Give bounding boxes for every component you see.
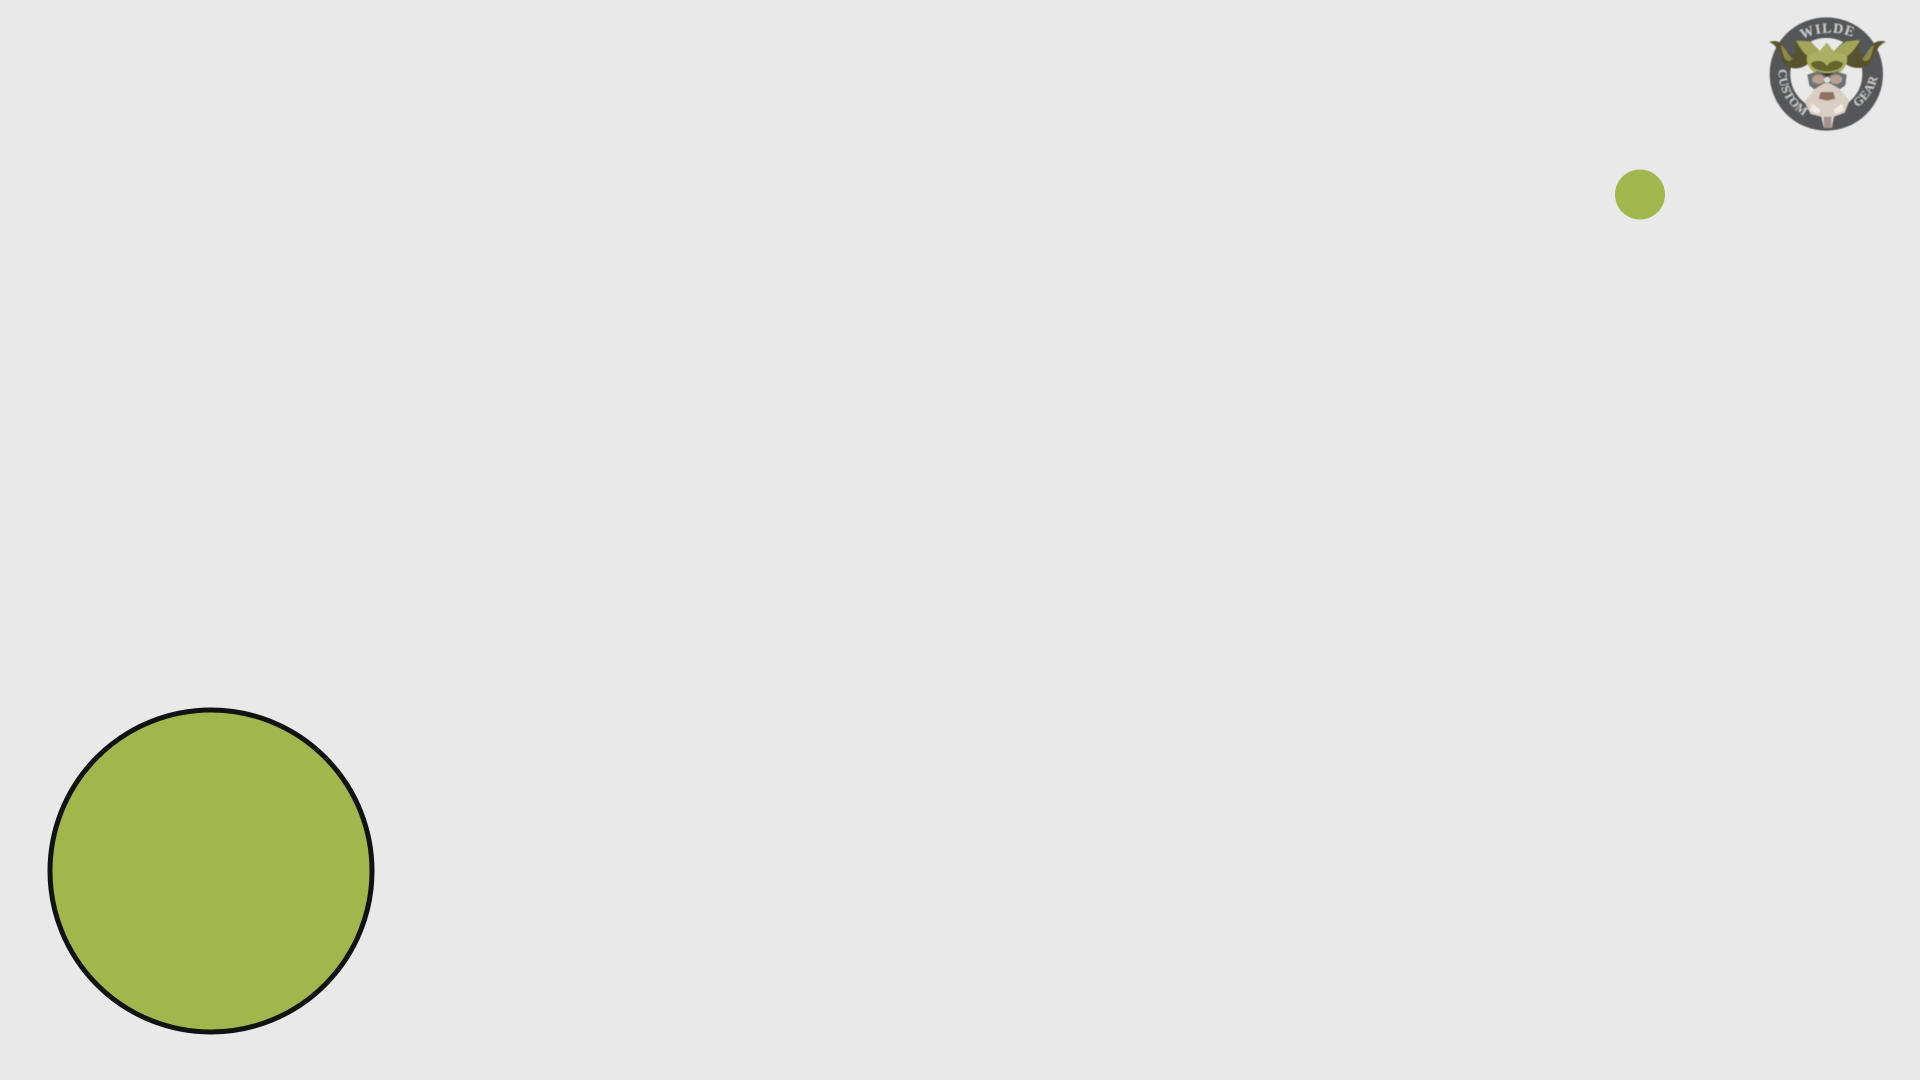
logo ring text: WILDE: WILDE <box>1798 22 1855 38</box>
logo ring text: GEAR: GEAR <box>1854 76 1878 106</box>
icon: Wilde Custom Gear logo <box>1769 16 1886 132</box>
logo ring text: CUSTOM: CUSTOM <box>1778 69 1808 116</box>
logo face and goggles <box>1807 71 1847 91</box>
logo horns <box>1769 39 1886 68</box>
large green circle <box>50 710 372 1032</box>
logo beard <box>1804 83 1849 128</box>
logo ring <box>1780 28 1873 120</box>
small green circle <box>1615 170 1665 220</box>
logo helmet <box>1807 43 1847 80</box>
logo helmet shadow <box>1811 61 1843 71</box>
